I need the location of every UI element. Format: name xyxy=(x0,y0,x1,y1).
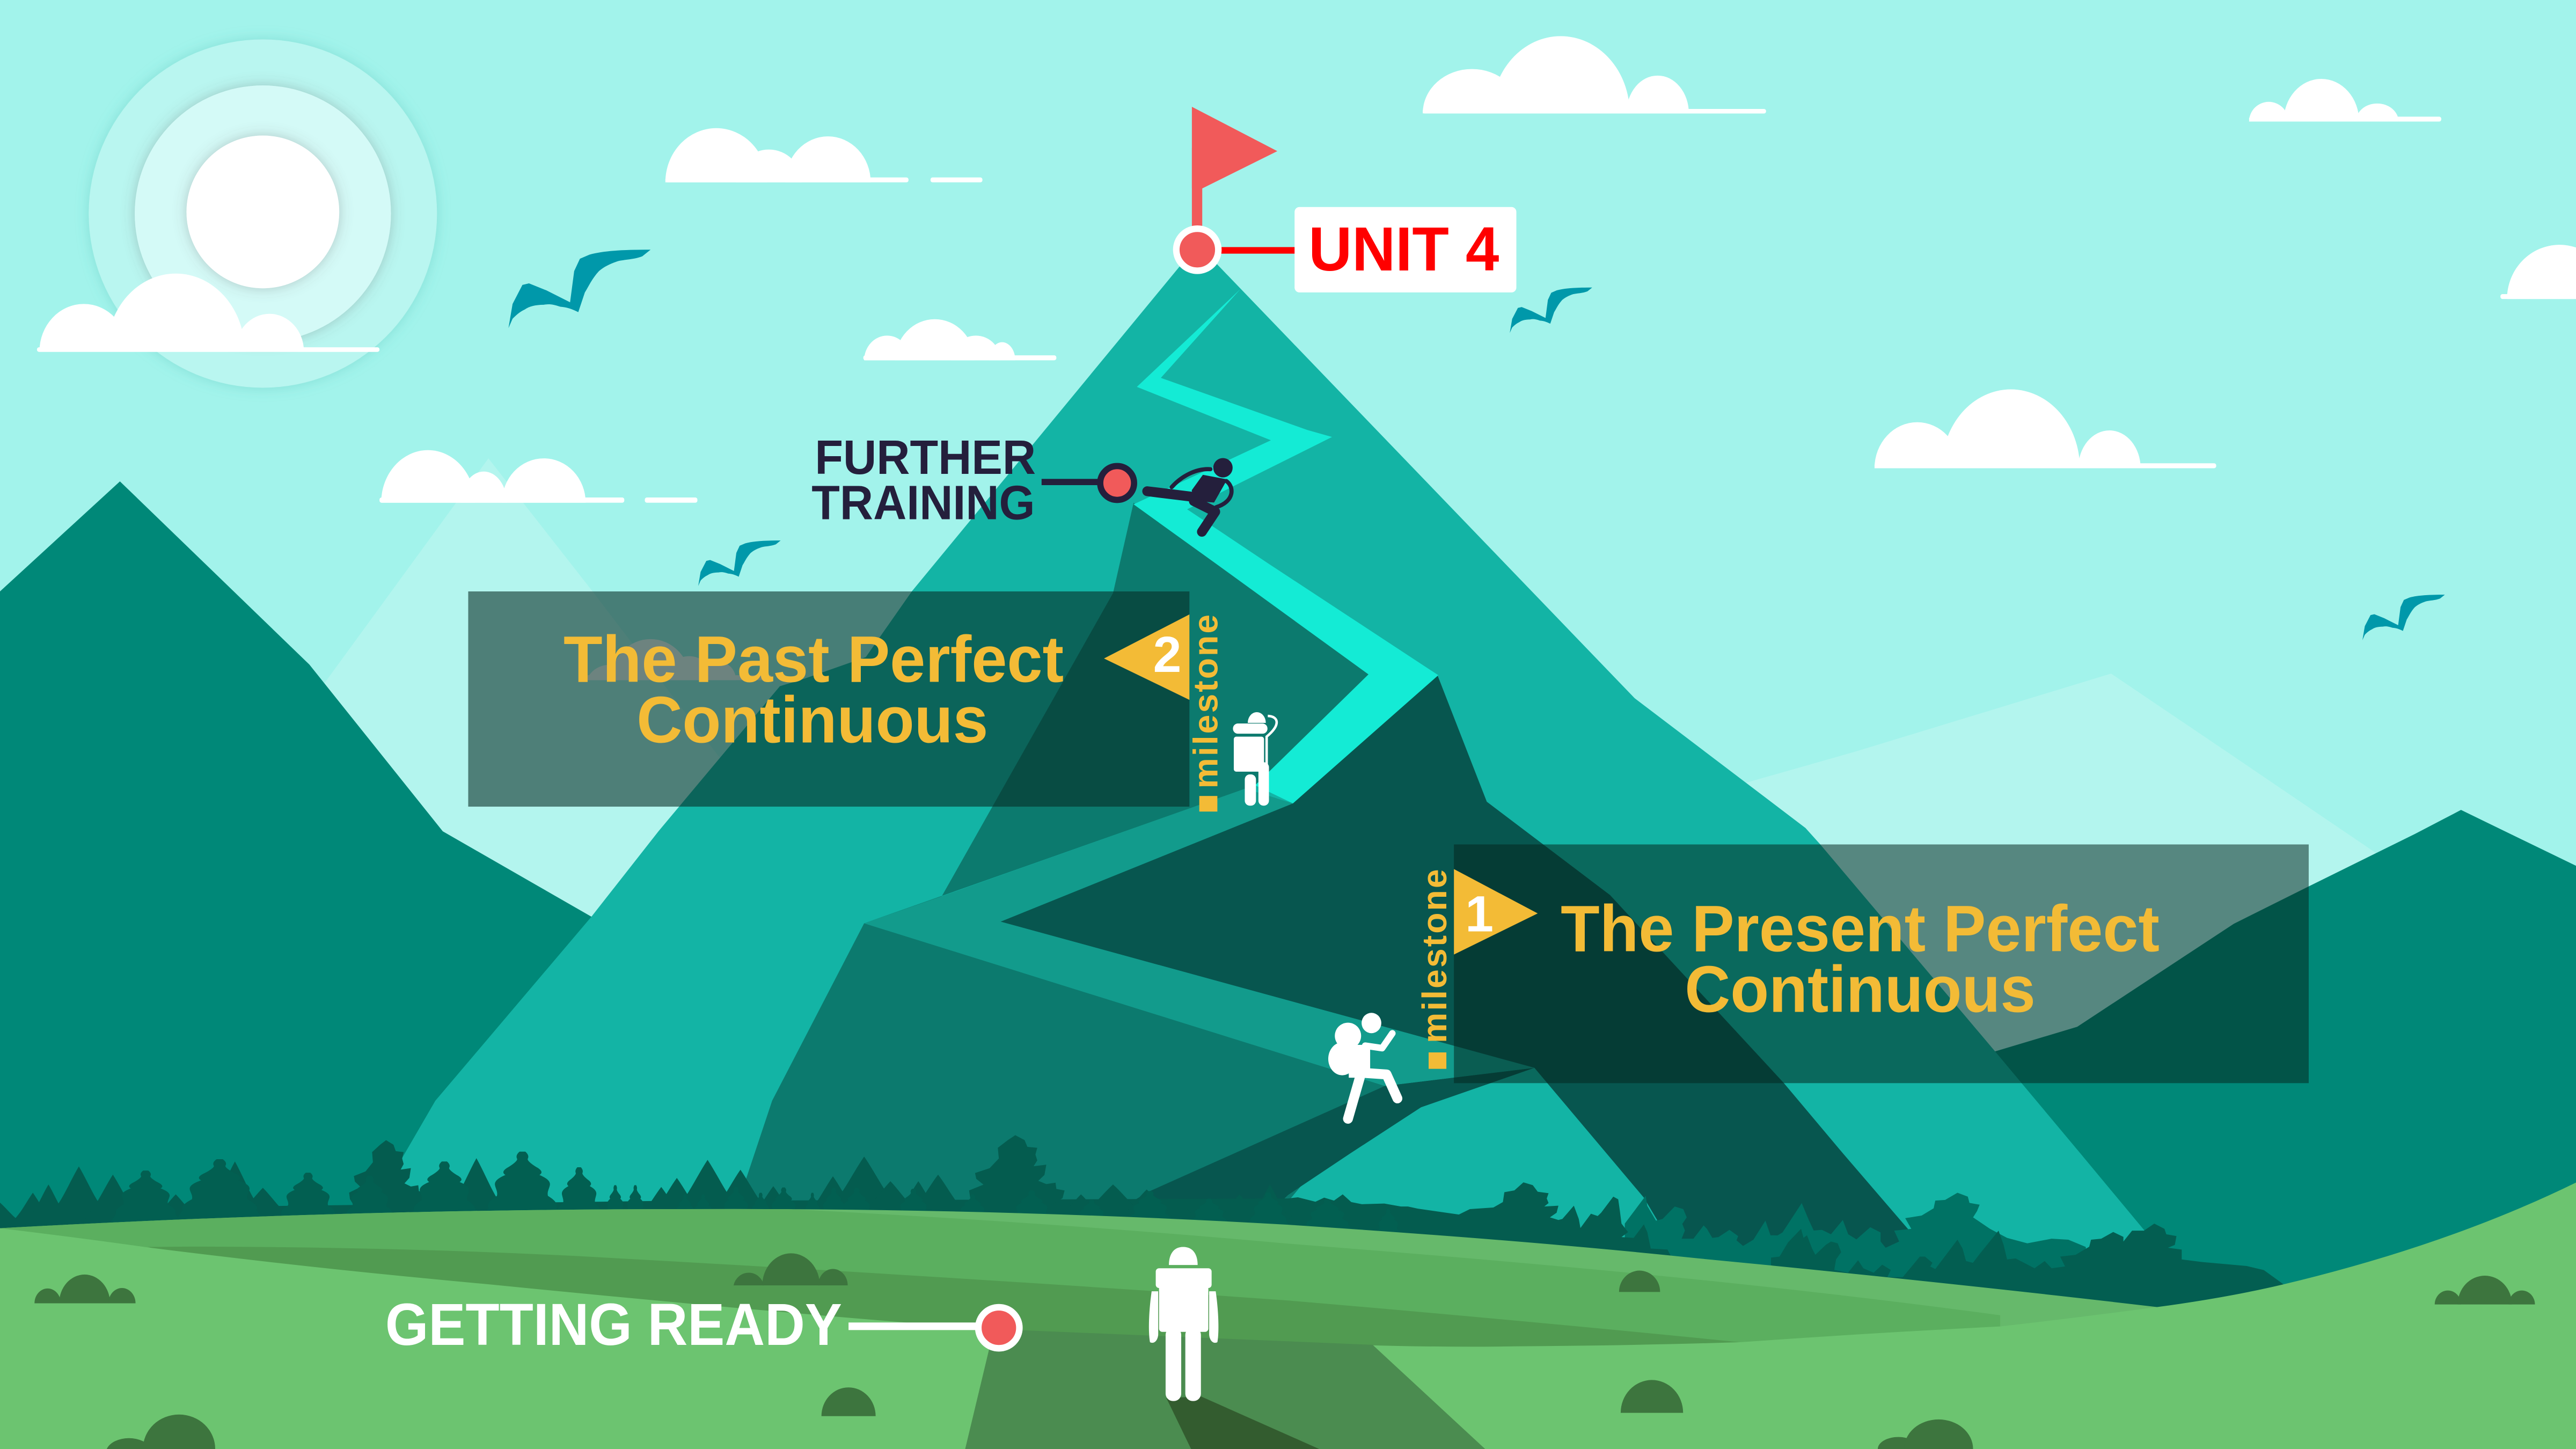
main mountain xyxy=(328,246,2193,1285)
heading: milestone 2 title: Continuous xyxy=(636,683,988,757)
hill shaded layer xyxy=(148,1247,1740,1364)
large ragged trees xyxy=(343,1135,1072,1232)
milestone 1 vertical label: milestone xyxy=(1415,867,1454,1043)
mid tree line, right xyxy=(1771,1224,2287,1322)
heading: milestone 2 title: The Past Perfect xyxy=(564,622,1064,696)
hill back layer xyxy=(0,1209,2157,1364)
muted trail band xyxy=(864,788,1534,1086)
getting ready marker xyxy=(978,1307,1019,1348)
milestone 2 number: 2 xyxy=(1153,626,1181,683)
trail shadow xyxy=(1166,1396,1319,1449)
birds xyxy=(508,250,2445,640)
cloud: sun cloud xyxy=(37,274,379,352)
cloud: centre xyxy=(863,319,1056,360)
bright trail xyxy=(1133,289,1438,803)
rounded spruce trees xyxy=(106,1152,1404,1245)
bushes xyxy=(34,1253,2535,1449)
label: FURTHER TRAINING xyxy=(811,430,1036,530)
cloud: top right xyxy=(2249,79,2441,122)
icon: hiker with backpack, side view xyxy=(1328,1013,1397,1119)
sun xyxy=(89,39,437,387)
cloud: upper centre left xyxy=(665,128,983,182)
forest xyxy=(0,1135,2287,1331)
label: FURTHER TRAINING: TRAINING xyxy=(811,475,1035,530)
panel: The Present Perfect Continuous xyxy=(1454,844,2309,1083)
dark tree line, left base xyxy=(0,1198,1298,1249)
left and right dark mountains xyxy=(0,481,2576,1449)
milestone 2 flag xyxy=(1104,614,1189,700)
icon: hiker at the base xyxy=(1149,1247,1218,1401)
milestone 1 number: 1 xyxy=(1465,886,1494,943)
upper shaded face xyxy=(864,503,1368,923)
label: FURTHER TRAINING: FURTHER xyxy=(815,430,1036,485)
trail on the ground xyxy=(965,1329,1485,1449)
cloud: top centre xyxy=(1423,36,1766,114)
front ground xyxy=(0,1182,2576,1449)
icon: kicking climber xyxy=(1147,458,1233,532)
lighter tree line, right xyxy=(1625,1192,2090,1314)
further training marker xyxy=(1100,466,1134,500)
label: GETTING READY: GETTING READY xyxy=(385,1292,842,1358)
panel: The Past Perfect Continuous xyxy=(468,591,1189,807)
milestone 1 flag xyxy=(1454,869,1538,955)
callout: UNIT 4: UNIT 4 xyxy=(1308,214,1499,284)
lower shaded face xyxy=(723,923,1385,1249)
icon: hiker on the ridge xyxy=(1233,712,1277,806)
hill middle layer xyxy=(0,1209,2000,1364)
pale distant mountains xyxy=(260,458,2432,1183)
pointed trees xyxy=(0,1157,1296,1232)
dark right face xyxy=(1000,675,1938,1265)
cloud: left mountain xyxy=(379,450,697,503)
summit flag xyxy=(1192,107,1277,238)
cloud: right edge xyxy=(2500,245,2576,299)
heading: milestone 2 title xyxy=(564,622,1064,757)
summit marker xyxy=(1176,229,1218,270)
getting ready connector xyxy=(848,1322,980,1330)
heading: milestone 1 title: Continuous xyxy=(1685,953,2036,1026)
cloud: behind past perfect panel xyxy=(585,639,771,680)
heading: milestone 1 title: The Present Perfect xyxy=(1561,891,2160,965)
dark sliver xyxy=(1051,1068,1534,1249)
summit connector xyxy=(1216,247,1298,254)
further training connector xyxy=(1042,479,1101,485)
dark tree line, centre xyxy=(1288,1182,1692,1331)
cloud: right xyxy=(1875,390,2216,468)
milestone 2 vertical label: milestone xyxy=(1186,613,1225,788)
heading: milestone 1 title xyxy=(1561,891,2160,1026)
